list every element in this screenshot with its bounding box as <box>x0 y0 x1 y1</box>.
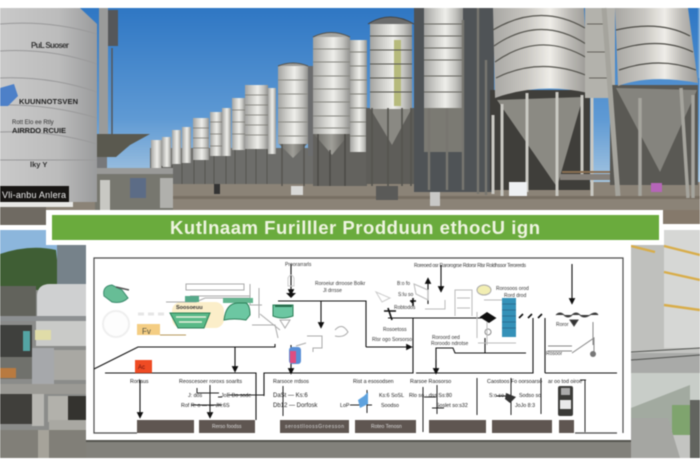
right photo: steel hall <box>631 230 700 458</box>
process row labels: JoJo 8:3 <box>515 403 535 409</box>
left photo: machinery <box>0 230 86 458</box>
box 6 <box>492 420 552 433</box>
large left tank: AIRRDO RCUIE <box>12 126 66 135</box>
process row labels: JoE Do sode <box>221 393 251 399</box>
labels: Roreoed osr Rarorogrse Rdorsr Rlsr Roldhssor Terorerds <box>414 263 526 269</box>
box 4: Roteo Tenosn <box>371 424 402 430</box>
main flow lines <box>94 301 617 420</box>
people and machinery <box>214 182 527 206</box>
top process cluster <box>103 262 598 364</box>
tank logo <box>0 84 18 106</box>
icon: magenta-blue pump <box>289 347 301 364</box>
labels: Rosoetoss <box>383 327 407 333</box>
icon: orange hopper box <box>137 324 160 336</box>
labels: Jl drrsse <box>323 288 342 294</box>
process row labels <box>130 379 582 409</box>
box 2: Rerso foodss <box>212 424 242 430</box>
large silo 492 <box>490 8 615 196</box>
box 3: serostlloossGroesson <box>285 424 344 430</box>
process row labels: Db12 — Dorfosk <box>273 403 318 409</box>
icon: yellow vessel <box>477 285 491 295</box>
large silo 615 <box>585 8 698 198</box>
process row labels: Soslet so:s32 <box>436 403 468 409</box>
distant silo row <box>150 85 470 184</box>
process row labels: ar oo tod oiroe <box>548 379 582 385</box>
process row labels: J: dos <box>188 393 202 399</box>
icon: outlined machines <box>296 326 348 352</box>
process row labels: Rorfaus <box>130 379 149 385</box>
top photo: silo plant <box>0 8 700 225</box>
labels: Rlsr ogo Sorsorso <box>372 337 412 343</box>
icon: faded vessel <box>103 311 129 337</box>
piping <box>166 284 280 338</box>
box 5 <box>429 420 486 433</box>
process row labels: Rlo so · dss Ss:80 <box>409 393 452 399</box>
title banner <box>47 210 663 242</box>
icon: pump machine <box>558 386 573 416</box>
tank text: KUUNNOTSVEN <box>19 97 78 106</box>
right edge sky <box>698 8 700 78</box>
process row labels: LoP <box>340 403 350 409</box>
box 2 <box>199 420 255 433</box>
icon: dark valve <box>505 393 516 403</box>
box 7 <box>559 420 574 433</box>
labels: Robtodos <box>394 305 416 311</box>
box 3 <box>280 420 349 433</box>
labels: Roroodo ndrotse <box>431 341 468 347</box>
labels: Proorarrarls <box>285 262 312 268</box>
frame lines <box>94 258 623 433</box>
left gantry <box>95 8 173 210</box>
labels: S:lu so <box>398 292 414 298</box>
process row labels: Soodso <box>381 403 399 409</box>
bottom ground strip <box>86 440 631 458</box>
icon: reactor with yellow tank <box>170 302 224 328</box>
process boxes <box>137 420 574 433</box>
icon: blue column <box>502 298 516 337</box>
box 4 <box>355 420 416 433</box>
icon: orange warning box: Ac <box>138 365 145 371</box>
lower vertical connectors <box>191 378 586 432</box>
icon: orange warning box <box>135 360 152 373</box>
process row labels: Rarsoe Raosorso <box>410 379 451 385</box>
process row labels: Rist a esosodsen <box>353 379 394 385</box>
process row labels: Sodso so <box>519 393 541 399</box>
icon: filter <box>280 320 290 328</box>
large left tank: lky Y <box>30 160 47 169</box>
silo 420 <box>414 8 494 195</box>
labels: Roroeiur drroose Bolkr <box>315 281 366 287</box>
process row labels: Reoscesoer roroxs soarlts <box>179 379 242 385</box>
icon: green cyclone <box>224 303 250 320</box>
process row labels: DaSt — Ks:6 <box>273 393 308 399</box>
labels: B:o fo <box>397 281 410 287</box>
tank plaque <box>0 186 69 202</box>
icon: green drum <box>273 305 293 318</box>
icon: dark valves <box>384 298 542 322</box>
process row labels: Rof R: o — — JK:6S <box>181 403 230 409</box>
title banner: Kutlnaam Furilller Prodduun ethocU ign <box>170 217 540 238</box>
tank plaque: Vli-anbu Anlera <box>2 190 66 200</box>
icon: blue valve <box>358 392 368 408</box>
icon: green rotary drum <box>104 285 128 302</box>
icon: reactor with yellow tank: Soosoeuu <box>176 305 203 311</box>
labels: Rosoor <box>546 351 562 357</box>
icon: orange hopper box: Fv <box>142 327 151 336</box>
process row labels: Ks:6 SoSL <box>379 393 404 399</box>
labels: Roroord oed <box>432 335 460 341</box>
silo 278 <box>278 63 313 186</box>
silo 313 <box>313 32 367 186</box>
labels: Roror <box>556 322 569 328</box>
process diagram panel <box>86 242 631 440</box>
labels <box>285 262 569 357</box>
arrows <box>140 264 572 416</box>
box 1 <box>137 420 194 433</box>
process row labels: S:o so <box>489 393 504 399</box>
labels: Rord drod <box>504 293 526 299</box>
process row labels: Rarsoce rrdsos <box>273 379 309 385</box>
large left tank: Rott Elo ee Rtly <box>12 120 54 126</box>
icon: coil <box>556 313 598 326</box>
silo 367 <box>366 17 414 186</box>
labels: Rorosoos orod <box>496 286 529 292</box>
large left tank <box>0 8 97 225</box>
process row labels: Caostoos Fo oorsoarso <box>487 379 542 385</box>
tank label: PuL Suoser <box>31 41 69 50</box>
